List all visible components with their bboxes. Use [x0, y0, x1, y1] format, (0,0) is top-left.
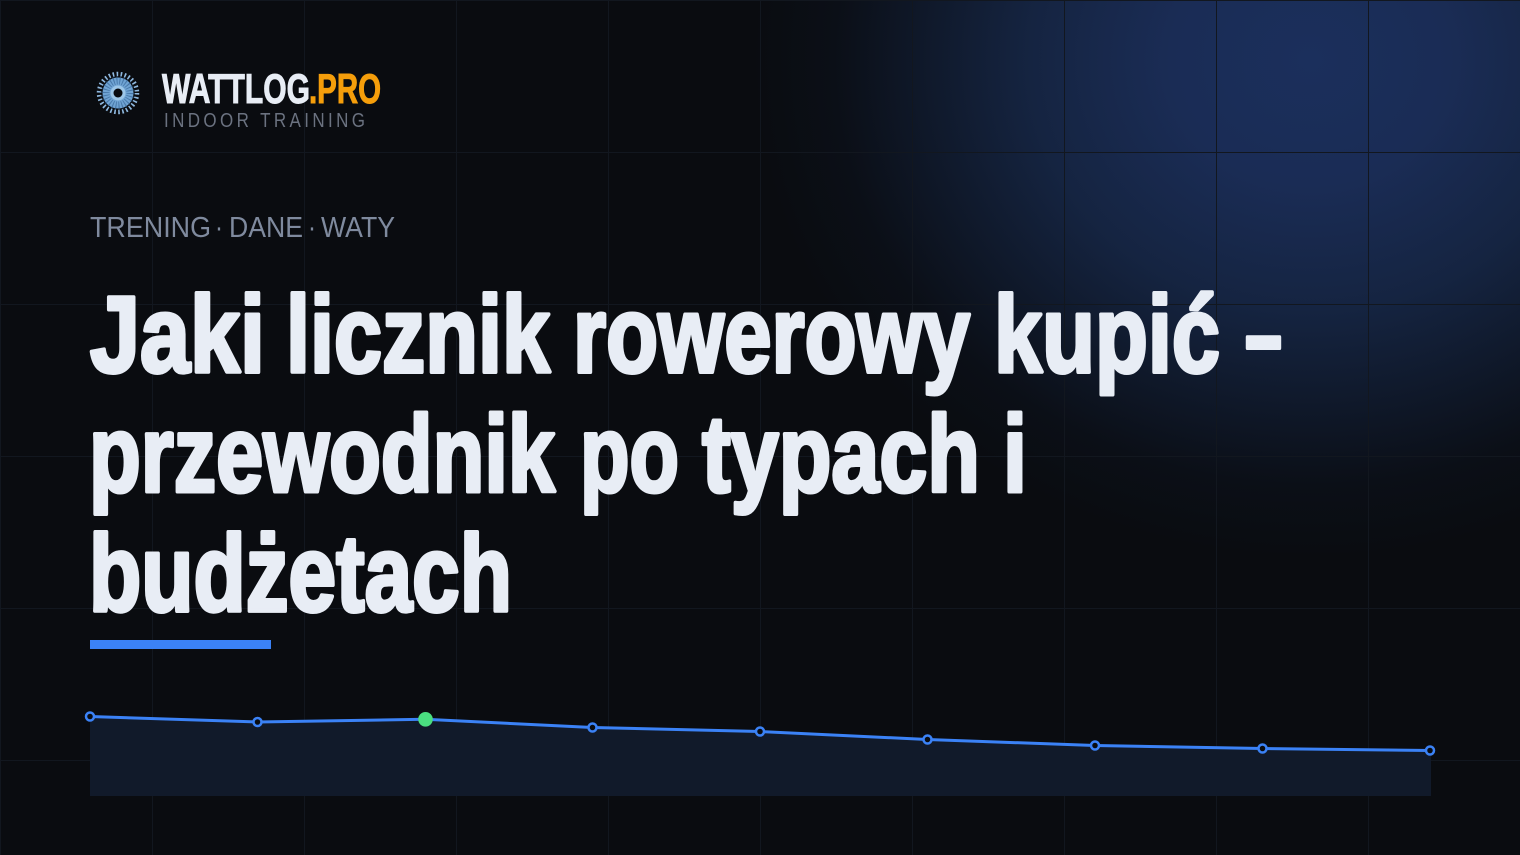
title accent underline	[90, 640, 271, 649]
brand name: .PRO	[309, 65, 381, 112]
title: budżetach	[89, 513, 512, 635]
brand tagline: INDOOR TRAINING	[164, 109, 369, 131]
title: kupić	[994, 274, 1220, 396]
eyebrow label: DANE	[229, 212, 303, 244]
eyebrow label: ·	[215, 212, 223, 244]
title: po	[580, 394, 679, 516]
eyebrow label: ·	[308, 212, 316, 244]
eyebrow label: TRENING	[90, 212, 211, 244]
chart line	[90, 716, 1430, 750]
brand name: WATTLOG	[162, 65, 310, 112]
chart area fill	[90, 716, 1431, 796]
title: –	[1245, 274, 1282, 396]
title: Jaki	[90, 274, 265, 396]
line chart	[86, 712, 1434, 796]
chart data points	[86, 712, 1434, 754]
title: przewodnik	[89, 394, 555, 516]
eyebrow label	[90, 212, 395, 244]
title: rowerowy	[573, 274, 970, 396]
title: licznik	[286, 274, 550, 396]
eyebrow label: WATY	[321, 212, 395, 244]
title: typach	[702, 394, 980, 516]
title: i	[1003, 394, 1027, 516]
logo: cassette gear icon	[99, 74, 137, 112]
highlighted peak point	[418, 712, 433, 727]
title	[89, 274, 1282, 635]
